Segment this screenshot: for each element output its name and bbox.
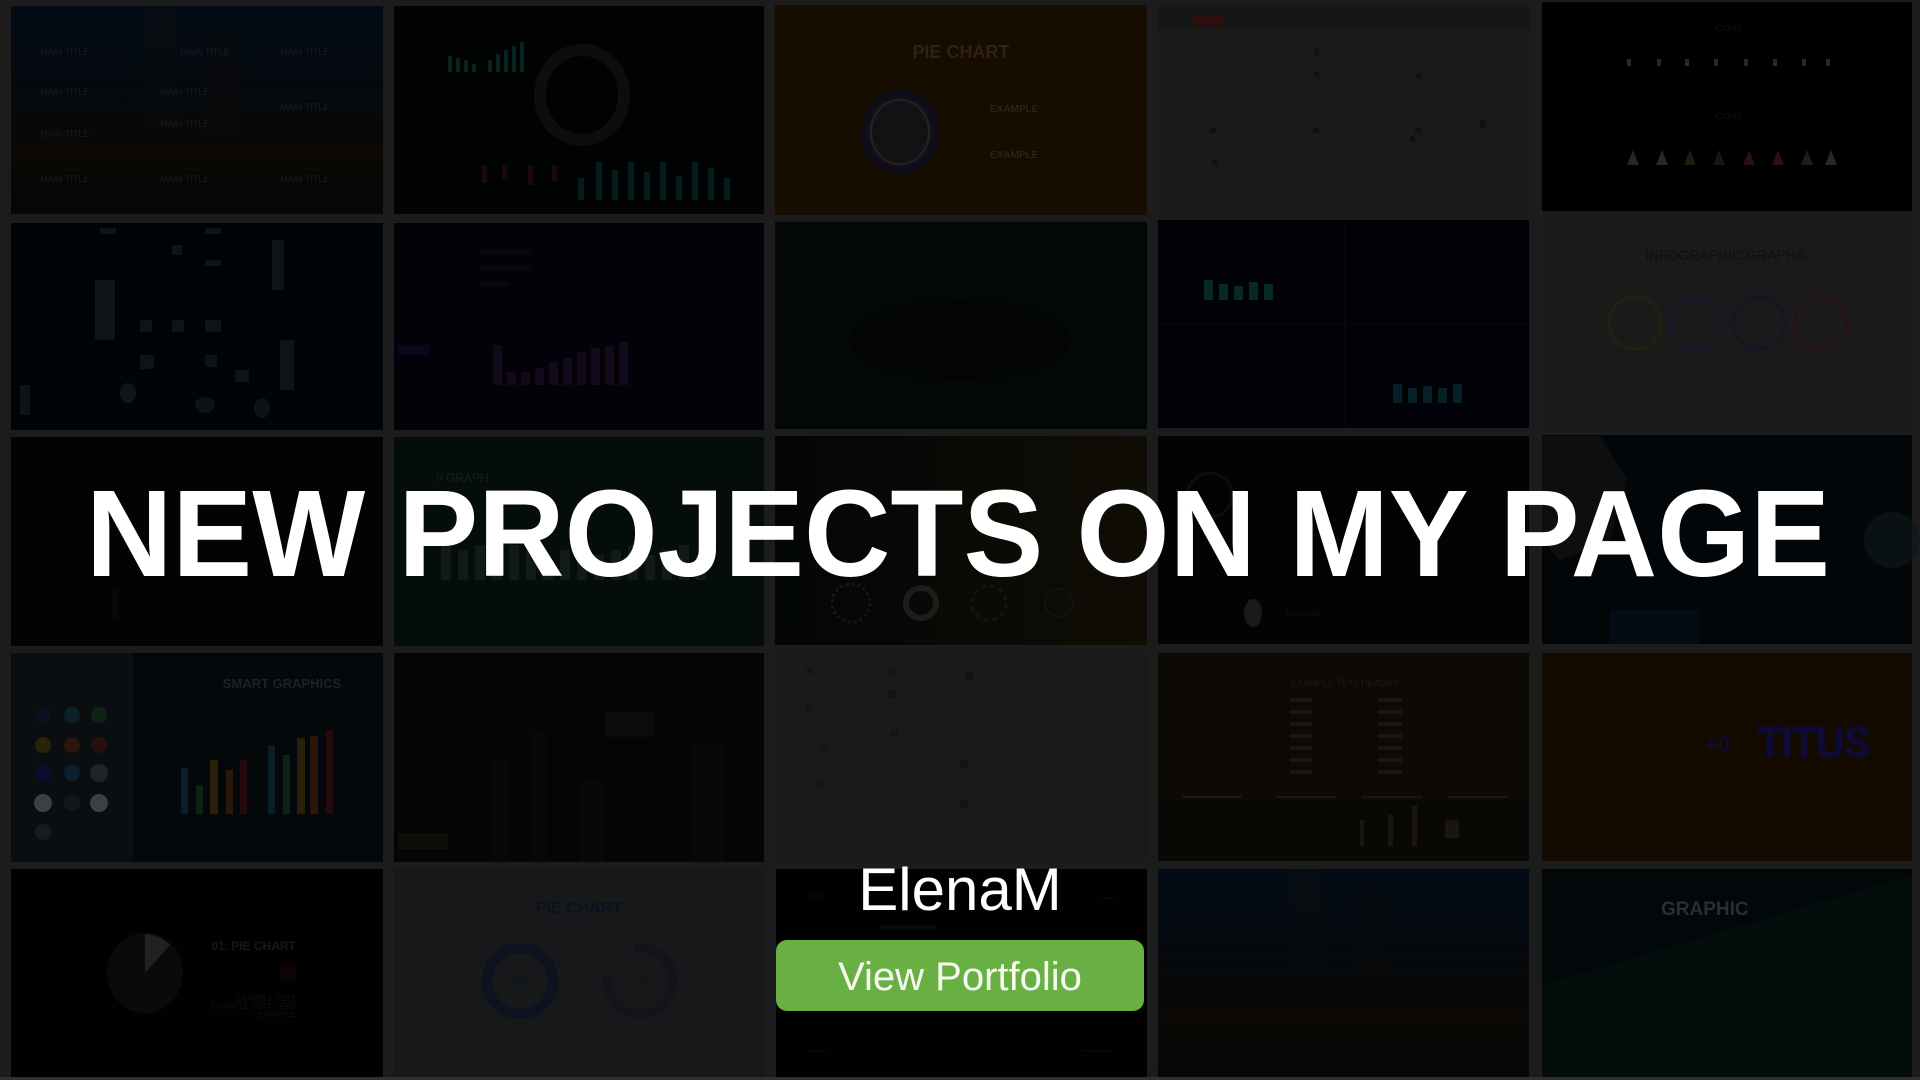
tile: teal graph: // GRAPH	[436, 471, 489, 485]
tile: orange pie chart: PIE CHART	[912, 42, 1010, 62]
tile: light pie chart pair: PIE CHART	[536, 900, 622, 917]
tile: black behind portfolio button	[776, 869, 1147, 1077]
tile: purple bar chart	[394, 223, 764, 430]
tile: city skyline list: MAIN TITLE	[160, 87, 209, 97]
tile: dark arcs	[1158, 436, 1529, 644]
view portfolio button: View Portfolio	[838, 955, 1082, 999]
tile: orange title card: TITUS	[1758, 718, 1870, 767]
tile: orange pie chart	[775, 5, 1147, 215]
tile: dark columns	[394, 653, 764, 862]
tile: brown list table	[1158, 653, 1529, 861]
tile: dark green graphic card	[1542, 869, 1912, 1077]
view portfolio button	[776, 940, 1144, 1011]
author name: ElenaM	[858, 856, 1062, 923]
tile: city skyline list: MAIN TITLE	[40, 47, 89, 57]
tile: city skyline list: MAIN TITLE	[40, 87, 89, 97]
tile: brown list table: EXAMPLE TEXT HEADER	[1291, 678, 1399, 688]
tile: smart graphics: SMART GRAPHICS	[223, 676, 342, 691]
tile: four gauges	[775, 436, 1147, 645]
bottom edge strip	[0, 1077, 1920, 1080]
tile: light icon field	[775, 653, 1147, 862]
tile: city skyline list: MAIN TITLE	[280, 47, 329, 57]
tile: orange pie chart: EXAMPLE	[990, 104, 1039, 115]
tile: black icon rows: ICONS	[1714, 23, 1742, 33]
tile: city skyline list: MAIN TITLE	[160, 174, 209, 184]
tile: infographic graphs donuts	[1542, 218, 1912, 430]
tile: black pie chart: EXAMPLE TEXT HERE	[211, 1002, 296, 1011]
tile: city skyline list: MAIN TITLE	[280, 174, 329, 184]
tile: light pie chart pair: 30	[632, 973, 648, 989]
tile: dark green blank	[775, 222, 1147, 429]
tile: orange title card	[1542, 653, 1912, 861]
tile: black pie chart: 01. PIE CHART	[211, 939, 297, 953]
tile: city skyline list: MAIN TITLE	[40, 174, 89, 184]
title: NEW PROJECTS ON MY PAGE	[86, 466, 1830, 603]
tile: infographic graphs donuts: INFOGRAPHIC GRAPHS	[1645, 247, 1805, 263]
tile: light icon grid	[1158, 5, 1530, 217]
tile: city skyline list: MAIN TITLE	[40, 129, 89, 139]
tile: dark green graphic card: GRAPHIC	[1661, 899, 1749, 920]
tile: orange title card: +0	[1705, 732, 1730, 757]
tile: teal graph	[394, 437, 764, 646]
tile: teal bars with portrait	[394, 6, 764, 214]
tile: black icon rows	[1542, 2, 1912, 211]
tile: black pie chart	[11, 869, 383, 1077]
tile: black pie chart: EXAMPLE	[258, 1010, 296, 1019]
tile: dark scattered icons	[11, 223, 383, 430]
tile: black panel	[11, 437, 383, 646]
tile: light pie chart pair	[394, 869, 764, 1077]
tile: dark blue scene with paper	[1542, 435, 1920, 644]
tile: dark arcs: Example	[1286, 608, 1321, 618]
tile: city skyline	[1158, 869, 1529, 1077]
tile: orange pie chart: EXAMPLE	[990, 150, 1039, 161]
tile: smart graphics	[11, 653, 383, 862]
tile: city skyline list: MAIN TITLE	[280, 102, 329, 112]
tile: city skyline list: MAIN TITLE	[180, 47, 229, 57]
tile: city skyline list: MAIN TITLE	[160, 119, 209, 129]
tile: black icon rows: ICONS	[1714, 111, 1742, 121]
tile: dashboard with four charts	[1158, 220, 1529, 428]
tile: black pie chart: EXAMPLE TEXT	[236, 994, 296, 1003]
tile: city skyline list	[11, 6, 383, 214]
tile: light pie chart pair: 60	[512, 973, 528, 989]
